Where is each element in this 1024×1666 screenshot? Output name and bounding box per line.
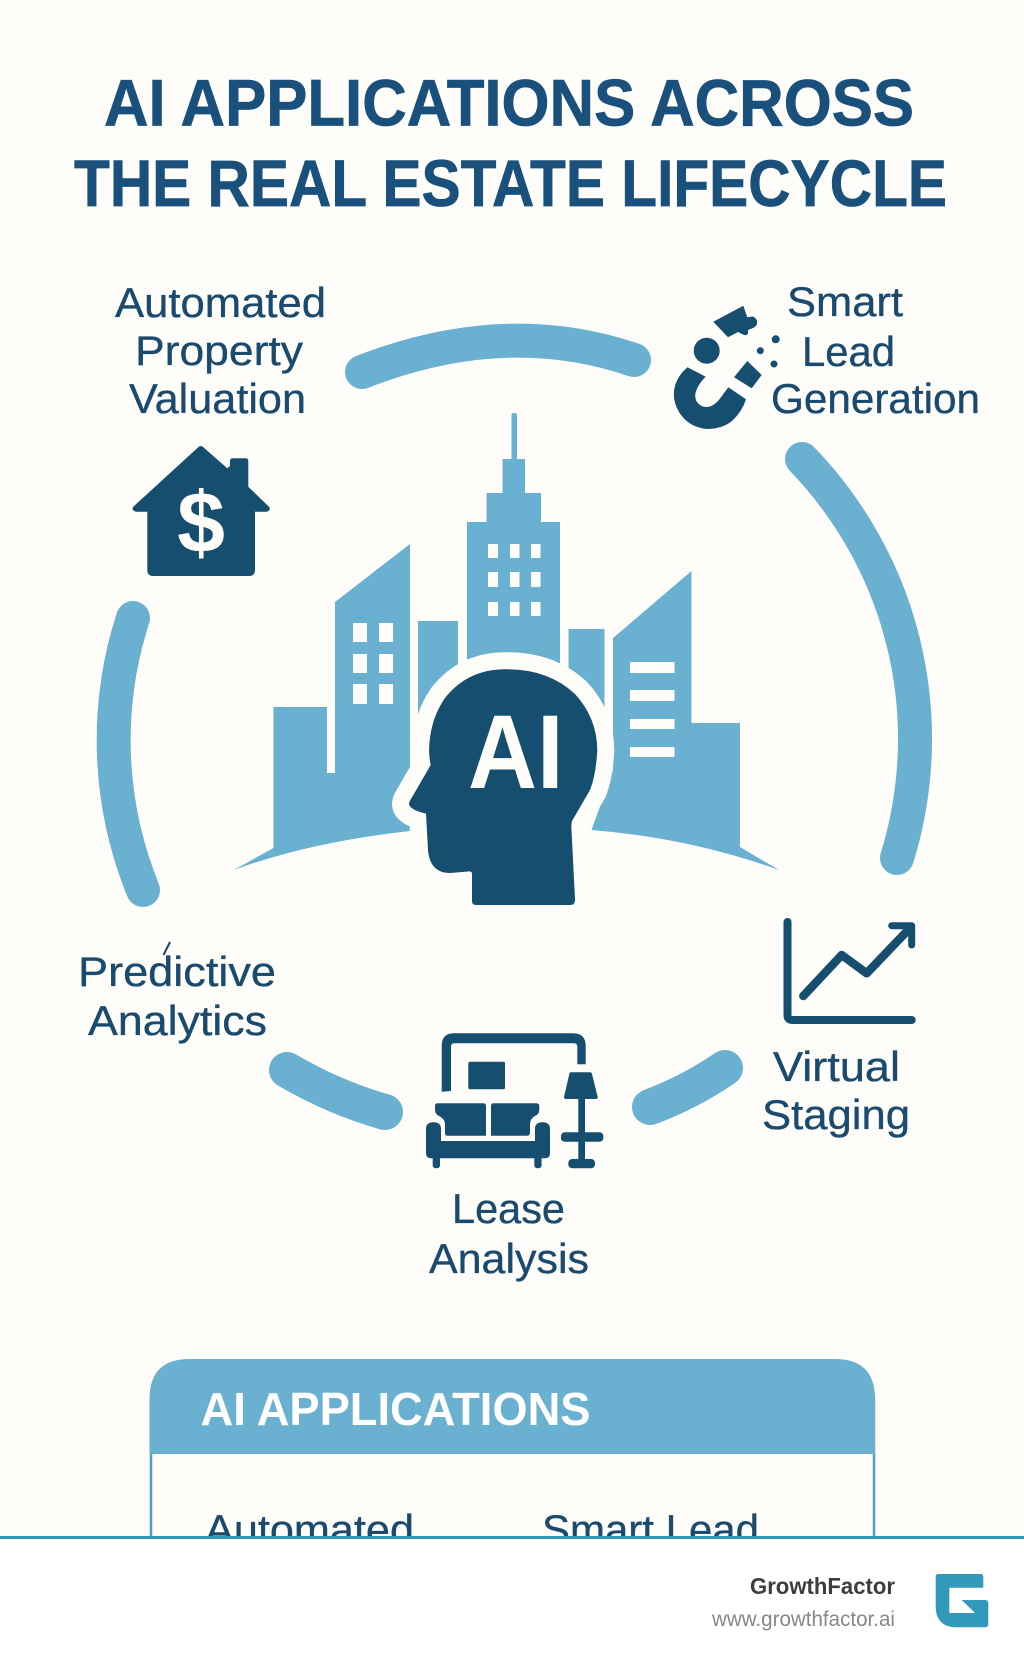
label: lease analysis: Analysis (429, 1235, 589, 1282)
label: smart lead generation (771, 278, 980, 422)
panel column labels: Smart Lead (542, 1506, 759, 1553)
label: smart lead generation: Smart (787, 278, 903, 325)
icon: house with dollar sign (132, 446, 270, 576)
label: automated property valuation: Automated (115, 279, 326, 326)
label: smart lead generation: Lead (802, 328, 895, 375)
panel column labels (205, 1506, 759, 1553)
label: automated property valuation: Valuation (129, 375, 306, 422)
label: automated property valuation (115, 279, 326, 422)
AI head icon: AI (468, 694, 564, 811)
panel heading: AI APPLICATIONS (200, 1383, 590, 1435)
label: predictive analytics: Analytics (88, 997, 267, 1044)
label: virtual staging: Staging (762, 1091, 910, 1138)
icon: house with dollar sign: $ (177, 475, 225, 571)
panel column labels: Automated (205, 1506, 414, 1553)
panel: AI applications table (150, 1359, 875, 1560)
footer url: www.growthfactor.ai (711, 1608, 895, 1631)
icon: growth chart (788, 922, 912, 1020)
footer brand name: GrowthFactor (750, 1573, 895, 1599)
central city skyline (234, 413, 779, 870)
label: virtual staging (762, 1043, 910, 1138)
label: smart lead generation: Generation (771, 375, 980, 422)
lifecycle ring arcs (114, 341, 915, 1112)
panel body (151, 1400, 874, 1560)
AI head icon (409, 669, 597, 905)
footer logo (936, 1574, 988, 1627)
label: predictive analytics (78, 942, 276, 1044)
title (74, 66, 947, 220)
icon: sofa and lamp in room (426, 1033, 603, 1168)
label: predictive analytics: Predictive (78, 948, 276, 995)
panel header (150, 1359, 875, 1454)
skyline windows (353, 544, 674, 757)
label: lease analysis (429, 1185, 589, 1282)
footer (0, 1536, 1024, 1666)
title: AI APPLICATIONS ACROSS (104, 66, 914, 140)
icon: magnet attracting leads (674, 306, 780, 429)
label: virtual staging: Virtual (773, 1043, 900, 1090)
label: automated property valuation: Property (135, 327, 303, 374)
label: lease analysis: Lease (452, 1185, 565, 1232)
